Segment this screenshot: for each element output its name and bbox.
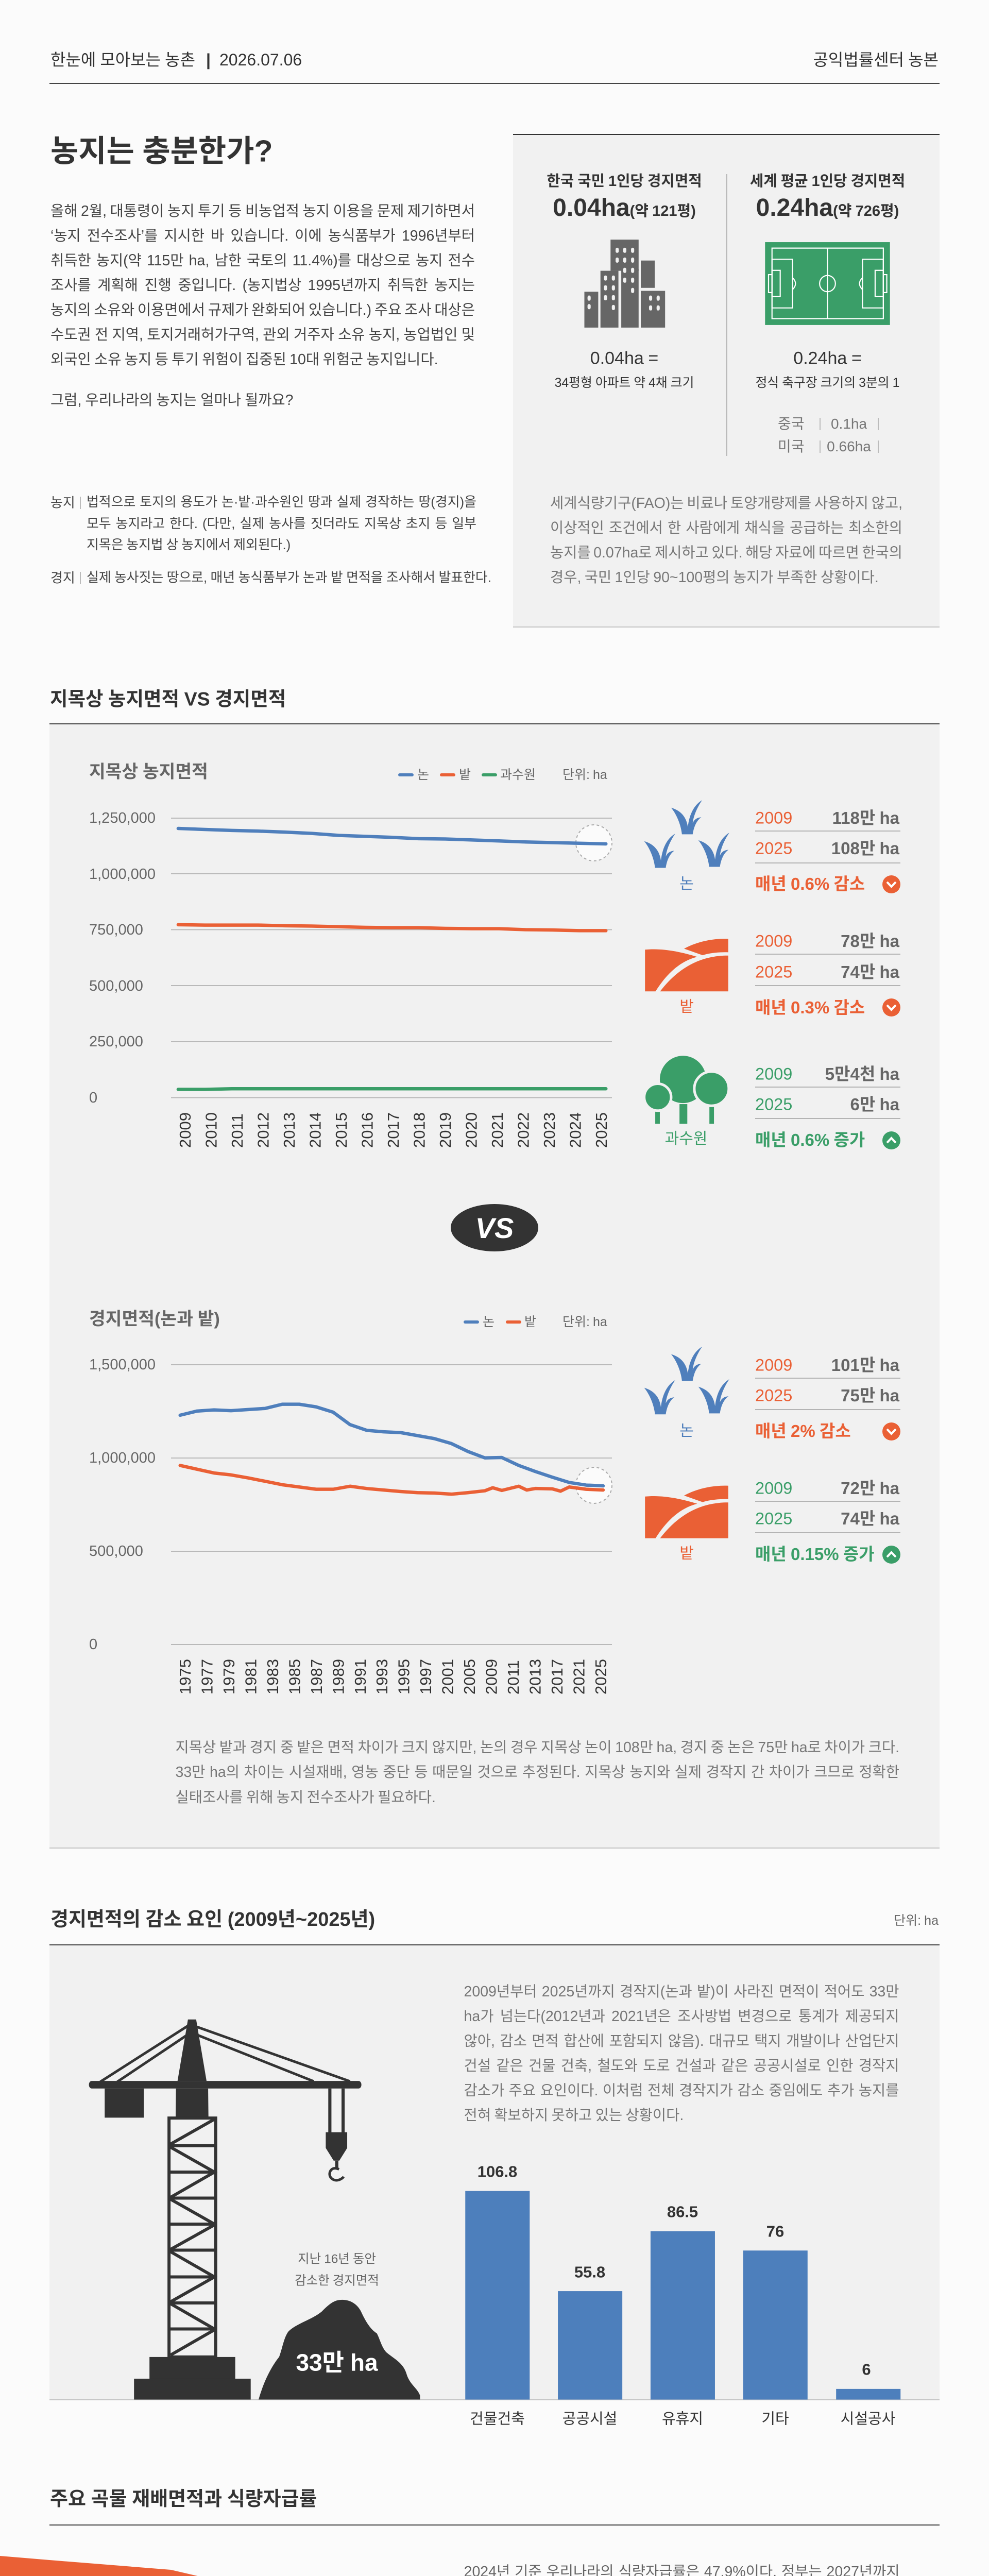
- label: dry field (cultivated): 밭: [679, 1545, 694, 1562]
- bar chart: decline factors: 86.5: [667, 2202, 698, 2221]
- stats: dry field cultivated: 72만 ha: [841, 1479, 899, 1498]
- chart commentary: 실태조사를 위해 농지 전수조사가 필요하다.: [175, 1789, 436, 1806]
- stats: dry field registered: 78만 ha: [841, 931, 899, 951]
- line chart: cultivated area: 2025: [592, 1659, 610, 1694]
- stats: paddy cultivated: 매년 2% 감소: [755, 1421, 851, 1440]
- FAO note: 경우, 국민 1인당 90~100평의 농지가 부족한 상황이다.: [550, 569, 879, 586]
- line chart: registered area: 2017: [384, 1112, 402, 1148]
- line chart: cultivated area: 1993: [373, 1659, 391, 1694]
- stats: paddy registered: 118만 ha: [832, 808, 899, 827]
- line chart: registered area: 2012: [254, 1112, 272, 1148]
- line chart: registered area: 1,250,000: [89, 810, 156, 826]
- line chart: cultivated area: 1,000,000: [89, 1450, 156, 1466]
- illustration: tower crane: [88, 2017, 363, 2400]
- chart heading: registered area: 지목상 농지면적: [89, 762, 208, 782]
- equivalence: Korea: 0.04ha =: [590, 349, 658, 368]
- intro paragraph: 농지의 소유와 이용면에서 규제가 완화되어 있습니다.) 주요 조사 대상은: [50, 302, 475, 318]
- bar chart: decline factors: 55.8: [574, 2263, 605, 2281]
- chart commentary: 지목상 밭과 경지 중 밭은 면적 차이가 크지 않지만, 논의 경우 지목상 논이 108만 ha, 경지 중 논은 75만 ha로 차이가 크다.: [175, 1739, 899, 1756]
- section heading: causes of decline: 경지면적의 감소 요인 (2009년~2025년): [50, 1909, 375, 1930]
- stats: paddy registered: 108만 ha: [831, 839, 899, 858]
- panel: registered vs cultivated farmland: [49, 723, 940, 1849]
- line chart: registered area: [89, 810, 612, 1148]
- icon: orchard: [645, 1056, 727, 1124]
- intro paragraph: 취득한 농지(약 115만 ha, 남한 국토의 11.4%)를 대상으로 농지 전수: [50, 252, 475, 269]
- bar chart: decline factors: 76: [766, 2222, 784, 2240]
- line chart: cultivated area: 1985: [285, 1659, 303, 1694]
- definition: 경지: 실제 농사짓는 땅으로, 매년 농식품부가 논과 밭 면적을 조사해서 발표한다.: [87, 570, 491, 585]
- line chart: registered area: 2016: [359, 1112, 376, 1148]
- VS badge: [451, 1204, 538, 1251]
- intro paragraph: 수도권 전 지역, 토지거래허가구역, 관외 거주자 소유 농지, 농업법인 및: [50, 327, 475, 343]
- FAO note: 이상적인 조건에서 한 사람에게 채식을 공급하는 최소한의: [550, 520, 902, 536]
- line chart: cultivated area: 1981: [242, 1659, 260, 1694]
- title: 농지는 충분한가?: [50, 134, 273, 168]
- line chart: cultivated area: 2011: [504, 1660, 522, 1694]
- label: paddy: 논: [679, 875, 694, 892]
- line chart: cultivated area: 1991: [351, 1659, 369, 1694]
- line chart: registered area: 2020: [463, 1112, 480, 1148]
- line chart: cultivated area: 2017: [548, 1659, 566, 1694]
- bar chart: decline factors: 기타: [761, 2411, 789, 2428]
- bar chart: decline factors: 유휴지: [662, 2411, 703, 2428]
- comparison: China and USA: 미국: [778, 438, 805, 454]
- commentary: decline factors: 감소가 주요 요인이다. 이처럼 전체 경작지가 감소 중임에도 추가 농지를: [464, 2082, 899, 2099]
- panel: intro: [50, 134, 491, 585]
- commentary: decline factors: 전혀 확보하지 못하고 있는 상황이다.: [464, 2107, 684, 2124]
- comparison: China and USA: 중국: [778, 416, 805, 432]
- legend: cultivated area: 단위: ha: [562, 1315, 607, 1329]
- line chart: cultivated area: 1989: [329, 1659, 347, 1694]
- definition: 농지: 지목은 농지법 상 농지에서 제외된다.): [87, 538, 291, 552]
- line chart: cultivated area: 500,000: [89, 1543, 143, 1560]
- line chart: cultivated area: 0: [89, 1636, 97, 1653]
- stats: paddy cultivated: 101만 ha: [831, 1355, 899, 1375]
- line chart: cultivated area: 2005: [461, 1659, 479, 1694]
- intro paragraph: ‘농지 전수조사’를 지시한 바 있습니다. 이에 농식품부가 1996년부터: [50, 228, 475, 244]
- stats: dry field registered: [755, 931, 900, 1017]
- stats: orchard registered: 2025: [755, 1095, 792, 1114]
- legend: registered area: [398, 768, 607, 782]
- stats: paddy registered: 2009: [755, 809, 792, 827]
- line chart: registered area: 2014: [306, 1112, 325, 1148]
- definition: 농지: [50, 495, 476, 552]
- chart heading: cultivated area: 경지면적(논과 밭): [89, 1309, 220, 1329]
- line chart: cultivated area: 1979: [220, 1659, 238, 1694]
- line chart: cultivated area: 2021: [570, 1659, 588, 1694]
- line chart: cultivated area: 2013: [526, 1659, 544, 1694]
- intro paragraph: [50, 203, 475, 368]
- FAO note: 세계식량기구(FAO)는 비료나 토양개량제를 사용하지 않고,: [550, 495, 902, 512]
- legend: registered area: 밭: [459, 768, 471, 782]
- line chart: cultivated area: 1,500,000: [89, 1357, 156, 1373]
- FAO note: 농지를 0.07ha로 제시하고 있다. 해당 자료에 따르면 한국의: [550, 545, 902, 561]
- icon: soil mound: [258, 2298, 422, 2400]
- legend: registered area: 논: [417, 768, 429, 782]
- callout: lost area: [258, 2249, 422, 2399]
- intro paragraph: 올해 2월, 대통령이 농지 투기 등 비농업적 농지 이용을 문제 제기하면서: [50, 203, 475, 219]
- caption: world: 정식 축구장 크기의 3분의 1: [756, 376, 899, 390]
- caption: lost area: 지난 16년 동안: [298, 2252, 376, 2266]
- line chart: registered area: 2025: [592, 1112, 610, 1148]
- value: Korea: 0.04ha(약 121평): [553, 194, 696, 222]
- bar chart: decline factors: 106.8: [478, 2162, 517, 2180]
- caption: lost area second line: 감소한 경지면적: [295, 2274, 379, 2287]
- heading: world: 세계 평균 1인당 경지면적: [750, 173, 905, 190]
- definition: 경지: 경지: [50, 570, 75, 585]
- line chart: registered area: 2009: [176, 1112, 194, 1148]
- header bar: |: [206, 50, 211, 69]
- stats: dry field cultivated: 매년 0.15% 증가: [755, 1545, 875, 1564]
- stats: paddy registered: 2025: [755, 839, 792, 857]
- line chart: registered area: 2010: [202, 1112, 220, 1148]
- header: publisher: 공익법률센터 농본: [813, 50, 939, 69]
- header: series name and date: [50, 50, 302, 69]
- stats: dry field cultivated: [755, 1478, 900, 1564]
- commentary: decline factors: 않아, 감소 면적 합산에 포함되지 않음). 대규모 택지 개발이나 산업단지: [464, 2033, 899, 2049]
- stats: orchard registered: 6만 ha: [850, 1095, 899, 1114]
- line chart: cultivated area: 2009: [483, 1659, 501, 1694]
- stats: orchard registered: [755, 1064, 900, 1149]
- section: food self-sufficiency: [0, 2488, 940, 2576]
- commentary: decline factors: [464, 1979, 899, 2128]
- column: Korea: [547, 173, 702, 390]
- arrow: falling self-sufficiency: [0, 2555, 899, 2576]
- caption: Korea: 34평형 아파트 약 4채 크기: [555, 376, 694, 390]
- line chart: registered area: 750,000: [89, 922, 143, 938]
- line chart: registered area: 2019: [436, 1112, 454, 1148]
- line chart: registered area: 0: [89, 1090, 97, 1106]
- definition: 농지: 모두 농지라고 한다. (다만, 실제 농사를 짓더라도 지목상 초지 등 일부: [87, 516, 476, 531]
- stats: dry field cultivated: 2009: [755, 1479, 792, 1497]
- line chart: cultivated area: 2001: [439, 1659, 457, 1694]
- commentary: decline factors: 건설 같은 건물 건축, 철도와 도로 건설과 같은 공공시설로 인한 경작지: [464, 2058, 899, 2074]
- line chart: cultivated area: 1997: [417, 1659, 435, 1694]
- line chart: cultivated area: 1977: [198, 1659, 216, 1694]
- commentary: decline factors: 2009년부터 2025년까지 경작지(논과 밭)이 사라진 면적이 적어도 33만: [464, 1984, 899, 2000]
- stats: dry field cultivated: 74만 ha: [841, 1509, 899, 1528]
- line chart: registered area: 250,000: [89, 1033, 143, 1050]
- stats: orchard registered: 5만4천 ha: [825, 1064, 899, 1083]
- FAO note: [550, 495, 902, 586]
- stats: dry field registered: 74만 ha: [841, 962, 899, 981]
- stats: paddy registered: 매년 0.6% 감소: [755, 874, 865, 893]
- line chart: registered area: 2013: [280, 1112, 298, 1148]
- stats: paddy cultivated: 2025: [755, 1386, 792, 1404]
- icon: paddy (cultivated): [644, 1346, 729, 1415]
- line chart: cultivated area: [88, 1355, 613, 1700]
- stats: orchard registered: 매년 0.6% 증가: [755, 1130, 865, 1149]
- line chart: cultivated area: 1975: [176, 1659, 194, 1694]
- definition: 농지: 법적으로 토지의 용도가 논·밭·과수원인 땅과 실제 경작하는 땅(경지)을: [87, 495, 476, 510]
- header: series name and date: 한눈에 모아보는 농촌: [50, 50, 195, 69]
- line chart: registered area: 2011: [228, 1113, 246, 1148]
- bar chart: decline factors: 건물건축: [470, 2411, 525, 2428]
- label: orchard: 과수원: [665, 1130, 707, 1147]
- value: world: 0.24ha(약 726평): [756, 194, 899, 222]
- line chart: registered area: 2022: [514, 1112, 533, 1148]
- legend: cultivated area: [464, 1315, 607, 1329]
- heading: Korea: 한국 국민 1인당 경지면적: [547, 173, 702, 190]
- stats: dry field registered: 매년 0.3% 감소: [755, 998, 865, 1017]
- line chart: registered area: 2021: [488, 1112, 506, 1148]
- comparison: China and USA: 0.66ha: [827, 438, 871, 454]
- line chart: registered area: 500,000: [89, 978, 143, 994]
- legend: cultivated area: 밭: [524, 1315, 536, 1329]
- bar chart: decline factors: 시설공사: [841, 2411, 895, 2428]
- bar chart: decline factors: 공공시설: [562, 2411, 617, 2428]
- line chart: registered area: 2024: [567, 1112, 584, 1148]
- stats: dry field cultivated: 2025: [755, 1510, 792, 1528]
- bar chart: decline factors: [464, 2143, 901, 2432]
- icon: buildings: [584, 240, 666, 328]
- stats: paddy registered: [755, 808, 900, 893]
- panel: causes of cultivated area decline: [49, 1944, 940, 2400]
- line chart: registered area: 2015: [332, 1112, 350, 1148]
- legend: cultivated area: 논: [483, 1315, 494, 1329]
- header bar: 2026.07.06: [219, 50, 302, 69]
- chart commentary: 33만 ha의 차이는 시설재배, 영농 중단 등 때문일 것으로 추정된다. 지목상 농지와 실제 경작지 간 차이가 크므로 정확한: [175, 1764, 899, 1781]
- stats: paddy cultivated: 75만 ha: [841, 1386, 899, 1405]
- comparison: China and USA: 0.1ha: [831, 416, 867, 432]
- stats: dry field registered: 2025: [755, 962, 792, 981]
- stats: orchard registered: 2009: [755, 1064, 792, 1083]
- intro paragraph: 외국인 소유 농지 등 투기 위험이 집중된 10대 위험군 농지입니다.: [50, 351, 438, 368]
- question line: 그럼, 우리나라의 농지는 얼마나 될까요?: [50, 392, 294, 409]
- equivalence: world: 0.24ha =: [793, 349, 862, 368]
- label: dry field: 밭: [679, 998, 694, 1015]
- icon: soccer field: [765, 242, 890, 325]
- definition: 농지: 농지: [50, 495, 75, 510]
- commentary: decline factors: ha가 넘는다(2012년과 2021년은 조사방법 변경으로 통계가 제공되지: [464, 2008, 899, 2025]
- stats: paddy cultivated: [755, 1355, 900, 1440]
- line chart: registered area: 2023: [540, 1112, 558, 1148]
- icon: dry field: [645, 939, 728, 991]
- line chart: cultivated area: 1983: [264, 1659, 282, 1694]
- column: world: [750, 173, 905, 454]
- unit label: 단위: ha: [894, 1913, 939, 1928]
- legend: registered area: 단위: ha: [562, 768, 607, 782]
- section heading: registered vs cultivated: 지목상 농지면적 VS 경지면적: [50, 688, 286, 710]
- intro paragraph: 조사를 계획해 진행 중입니다. (농지법상 1995년까지 취득한 농지는: [50, 277, 475, 294]
- header bar: [49, 50, 940, 84]
- section heading: food self-sufficiency: 주요 곡물 재배면적과 식량자급률: [50, 2488, 317, 2510]
- VS badge: VS: [475, 1212, 514, 1244]
- panel: per-capita farmland comparison: [513, 134, 940, 628]
- stats: dry field registered: 2009: [755, 931, 792, 950]
- stats: paddy cultivated: 2009: [755, 1356, 792, 1375]
- icon: paddy: [644, 800, 729, 868]
- chart commentary: [175, 1735, 899, 1810]
- line chart: cultivated area: 1995: [395, 1659, 413, 1694]
- line chart: cultivated area: 1987: [308, 1659, 326, 1694]
- line chart: registered area: 1,000,000: [89, 866, 156, 883]
- bar chart: decline factors: 6: [862, 2360, 871, 2378]
- legend: registered area: 과수원: [500, 768, 536, 782]
- label: paddy (cultivated): 논: [679, 1422, 694, 1439]
- icon: dry field (cultivated): [645, 1485, 728, 1538]
- comparison: China and USA: [778, 416, 879, 454]
- line chart: registered area: 2018: [410, 1112, 429, 1148]
- value: lost area: 33만 ha: [296, 2349, 378, 2376]
